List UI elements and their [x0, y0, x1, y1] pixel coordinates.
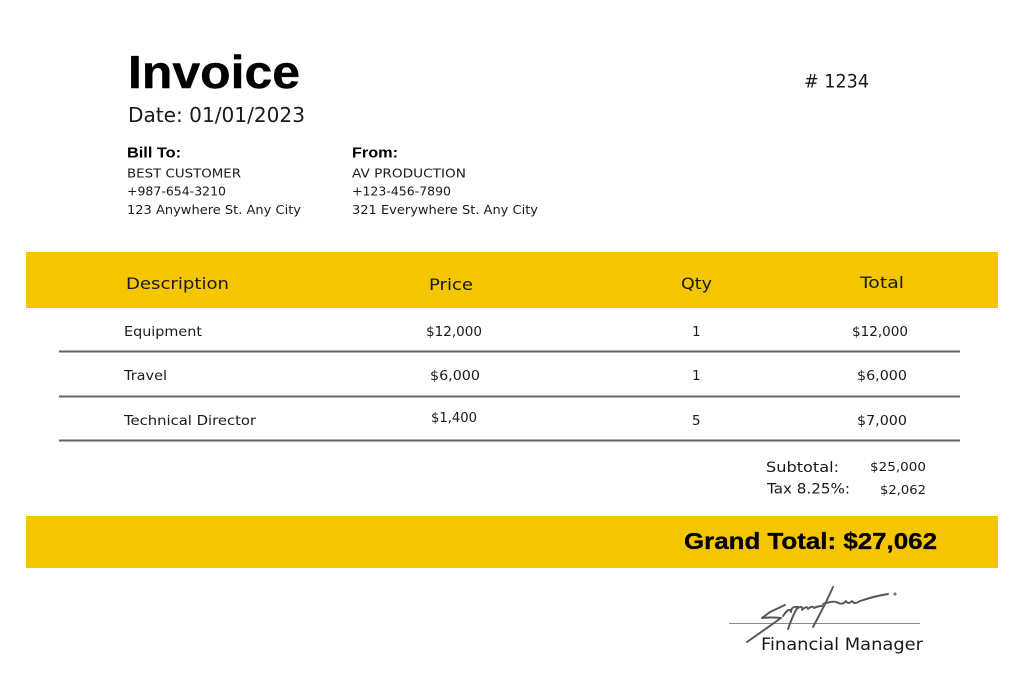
sender address: 321 Everywhere St. Any City — [352, 202, 539, 217]
subtotals — [766, 459, 926, 498]
column: total: Total — [859, 273, 904, 292]
column: description: Description — [126, 274, 229, 293]
row: equipment: 1 — [692, 324, 701, 340]
from block — [352, 144, 539, 217]
invoice number: # 1234 — [804, 70, 869, 92]
row: travel — [123, 368, 907, 384]
subtotal value: $25,000 — [870, 459, 926, 474]
row: equipment: $12,000 — [426, 324, 482, 340]
subtotal label: Subtotal: — [766, 460, 839, 476]
signer title: Financial Manager — [761, 635, 923, 655]
column: quantity: Qty — [681, 274, 712, 293]
row: equipment: Equipment — [124, 324, 202, 340]
customer name: BEST CUSTOMER — [127, 166, 241, 180]
row: technical director: Technical Director — [123, 413, 256, 429]
customer phone: +987-654-3210 — [127, 184, 226, 198]
table header band — [26, 252, 998, 308]
from heading: From: — [352, 144, 398, 162]
tax value: $2,062 — [880, 482, 926, 497]
signature line — [729, 623, 920, 624]
row: technical director — [123, 410, 907, 429]
row: travel: $6,000 — [430, 368, 480, 384]
row: travel: Travel — [123, 368, 167, 384]
bill to heading: Bill To: — [127, 144, 181, 162]
icon: handwritten signature — [747, 587, 896, 642]
row: equipment: $12,000 — [852, 324, 908, 340]
row: technical director: $7,000 — [857, 413, 907, 429]
sender phone: +123-456-7890 — [352, 184, 451, 198]
column: price: Price — [429, 275, 473, 294]
header background — [26, 252, 998, 308]
table rows — [59, 324, 960, 442]
row: technical director: 5 — [692, 413, 701, 429]
customer address: 123 Anywhere St. Any City — [127, 202, 302, 217]
grand total text: Grand Total: $27,062 — [684, 528, 937, 554]
tax label: Tax 8.25%: — [766, 482, 850, 498]
row: travel: $6,000 — [857, 368, 907, 384]
row: equipment — [124, 324, 908, 340]
signature block — [729, 587, 923, 655]
sender name: AV PRODUCTION — [352, 166, 466, 180]
row: technical director: $1,400 — [431, 410, 477, 426]
header block — [128, 46, 869, 127]
title: Invoice — [128, 46, 300, 98]
grand total band — [26, 516, 998, 568]
grand total background — [26, 516, 998, 568]
row: travel: 1 — [692, 368, 701, 384]
invoice date: Date: 01/01/2023 — [128, 103, 305, 127]
bill to block — [127, 144, 302, 217]
